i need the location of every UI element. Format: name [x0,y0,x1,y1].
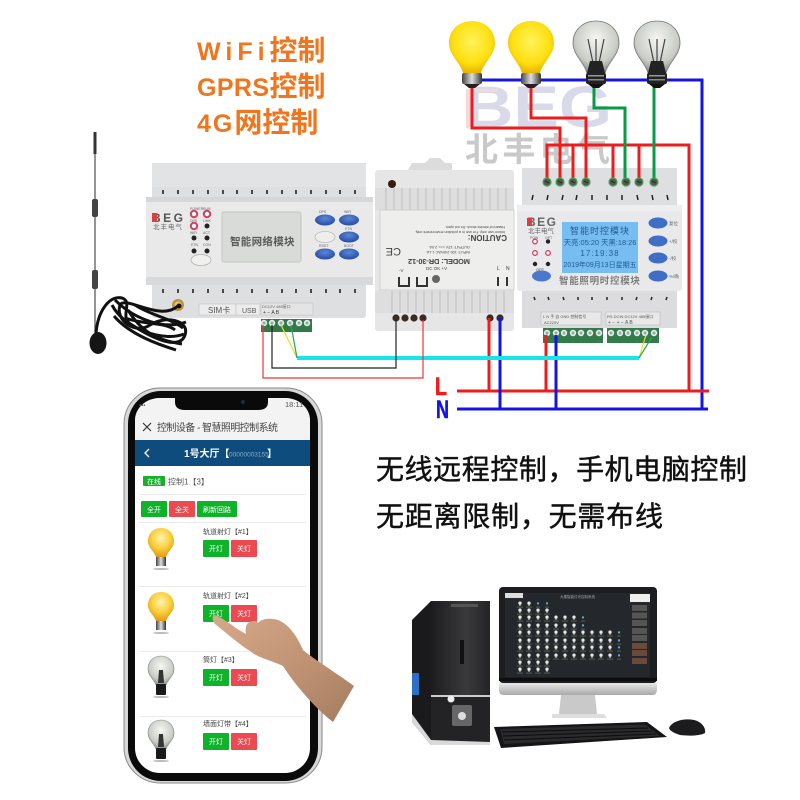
antenna connector [172,299,184,311]
online status [143,476,209,486]
row 3: 开灯 [209,673,223,682]
label: rotated product text: Indoor use only. For use in a pollution environment only. [415,230,505,234]
keyboard [494,722,667,748]
group buttons [141,501,237,517]
label: live line: L [435,373,447,401]
icon: antenna [90,132,186,354]
LEDs [530,236,553,282]
status LEDs [190,207,211,266]
port labels: DC12V 485接口 [262,303,291,309]
blue buttons: ETN [345,227,352,231]
terminal labels: + − + − A B [608,320,633,326]
display: 智能网络模块 [230,235,295,248]
device title bar [135,440,310,466]
row 2: 开灯 [209,609,223,618]
LCD screen: 智能时控模块 [570,225,630,236]
row 4: 关灯 [237,737,251,746]
blue buttons: DPS [319,210,327,214]
device title bar: 1号大厅【 [184,447,230,460]
status LEDs: WIFI [190,231,197,235]
logo: BEG [527,215,556,229]
side buttons: -/校 [669,255,677,262]
app header [135,421,310,440]
LEDs: POW [530,236,539,240]
panel: power supply [375,158,514,331]
status bar: ▪▪▪ [139,403,145,409]
row 2: 轨道射灯【#2】 [203,591,253,600]
title line: WiFi control: WiFi控制 [197,35,326,66]
top terminals [542,177,659,187]
blue buttons: RSST [319,244,329,248]
mouse [669,719,705,736]
LCD screen: 2019年09月13日星期五 [563,260,637,269]
side buttons: %/确 [669,273,679,280]
panel: phone app [124,388,322,783]
label: rotated product text: INPUT: 100-240VAC 1.1A [426,250,470,254]
bus wires: live and neutral [457,391,709,409]
screen icon grid [517,602,621,673]
blue drops [500,318,556,409]
logo: 北丰电气 [528,226,554,235]
port labels: USB [242,308,257,315]
BEG logo: 北丰电气 [153,222,182,231]
side buttons: +/校 [669,238,678,245]
status LEDs: CON [203,243,211,247]
LCD screen: 天亮:05:20 天黑:18:26 [564,238,636,247]
port labels [199,303,313,316]
blue buttons [315,210,359,260]
label: output terminals [399,277,507,286]
monitor [499,587,657,718]
status LEDs: POWER [190,207,204,211]
row 1: 关灯 [237,544,251,553]
icon: hand pressing button [213,615,354,722]
module name: 智能照明时控模块 [559,275,641,287]
title: control methods [197,35,326,138]
row 1: 轨道射灯【#1】 [203,527,253,536]
red switched wires [472,85,689,391]
status LEDs: DPS [190,219,198,223]
group buttons: 全关 [175,505,189,514]
label: rotated product text: Hazard of electric shock. Do not open. [445,225,505,229]
row 3 [148,655,257,698]
green switched wires [594,85,654,182]
neutral wire from bulbs [480,80,702,409]
terminals [392,314,504,322]
status LEDs: RUN [203,207,211,211]
panel: network module [146,163,373,332]
device title bar: 00000003155 [229,452,269,458]
icon: off bulb 4 [634,21,680,88]
blue buttons: WIFI [344,210,351,214]
panel: power supply: DC OK +V [426,266,447,271]
text: wireless remote control: 无线远程控制，手机电脑控制 [376,454,747,485]
watermark: company name: 北丰电气 [465,131,610,168]
row 2: 关灯 [237,609,251,618]
row 2 [148,591,257,634]
label: rotated product text: CE [386,245,401,257]
terminal labels: RS DCIN DC12V 485接口 [607,313,653,319]
label: rotated product text: CAUTION: [468,233,507,242]
signal wires [263,320,652,378]
BEG logo: BEG [152,211,183,225]
blue buttons: BOOT [344,244,355,248]
status LEDs: LINK [203,219,211,223]
tower [412,601,490,745]
lower terminal blocks [543,328,659,343]
label: neutral line: N [436,396,449,424]
online status: 在线 [147,477,161,486]
icon: lit bulb 1 [449,21,495,88]
LEDs: OPT [536,267,545,272]
status bar [135,398,310,423]
title line: GPRS control: GPRS控制 [197,71,325,102]
status bar: 18:11 [285,400,303,409]
panel: lighting timer module [517,168,682,343]
panel: power supply: L [497,266,500,272]
icon: lit bulb 2 [508,21,554,88]
terminal labels: AC220V [544,320,559,325]
text: no distance limit: 无距离限制，无需布线 [376,501,663,532]
row 3: 关灯 [237,673,251,682]
terminal labels: L N 手 自 GND 控制信号 [543,313,586,319]
LEDs: OPT [545,236,553,240]
status LEDs: ETN [191,243,198,247]
panel: power supply: N [506,266,510,272]
app header: 控制设备 - 智慧照明控制系统 [157,421,278,434]
terminal labels [541,312,660,326]
wiring diagram [263,80,709,409]
row 1 [148,527,257,570]
device title bar: 】 [267,448,277,460]
LCD screen: 17:19:38 [580,249,620,258]
row 4: 墙面灯带【#4】 [203,719,253,728]
icon: off bulb 3 [573,21,619,88]
title line: 4G control: 4G网控制 [197,107,318,138]
label: rotated product text [386,225,507,266]
LCD screen [562,222,638,273]
side buttons: 复位 [669,220,678,227]
panel: desktop computer [412,587,705,748]
row 4: 开灯 [209,737,223,746]
label: rotated product text: OUTPUT: 12V === 2.0A [429,245,470,249]
panel: power supply: -V [399,268,404,273]
port labels: + − A B [263,310,280,316]
watermark: BEG logo: BEG [464,75,612,140]
side buttons [648,218,679,282]
screen side buttons [632,605,647,664]
port labels: SIM卡 [208,305,230,315]
display [222,212,301,262]
row 3: 筒灯【#3】 [203,655,239,664]
monitor: 大楼智能灯光控制系统 [560,594,595,599]
online status: 控制1【3】 [168,476,209,486]
group buttons: 刷新回路 [203,505,231,514]
row 4 [148,719,257,762]
terminal block [261,319,312,332]
row 1: 开灯 [209,544,223,553]
status LEDs: ACT [203,231,211,235]
label: rotated product text: MODEL: DR-30-12 [408,257,470,266]
RS485 cyan cable [297,356,639,360]
group buttons: 全开 [147,505,161,514]
